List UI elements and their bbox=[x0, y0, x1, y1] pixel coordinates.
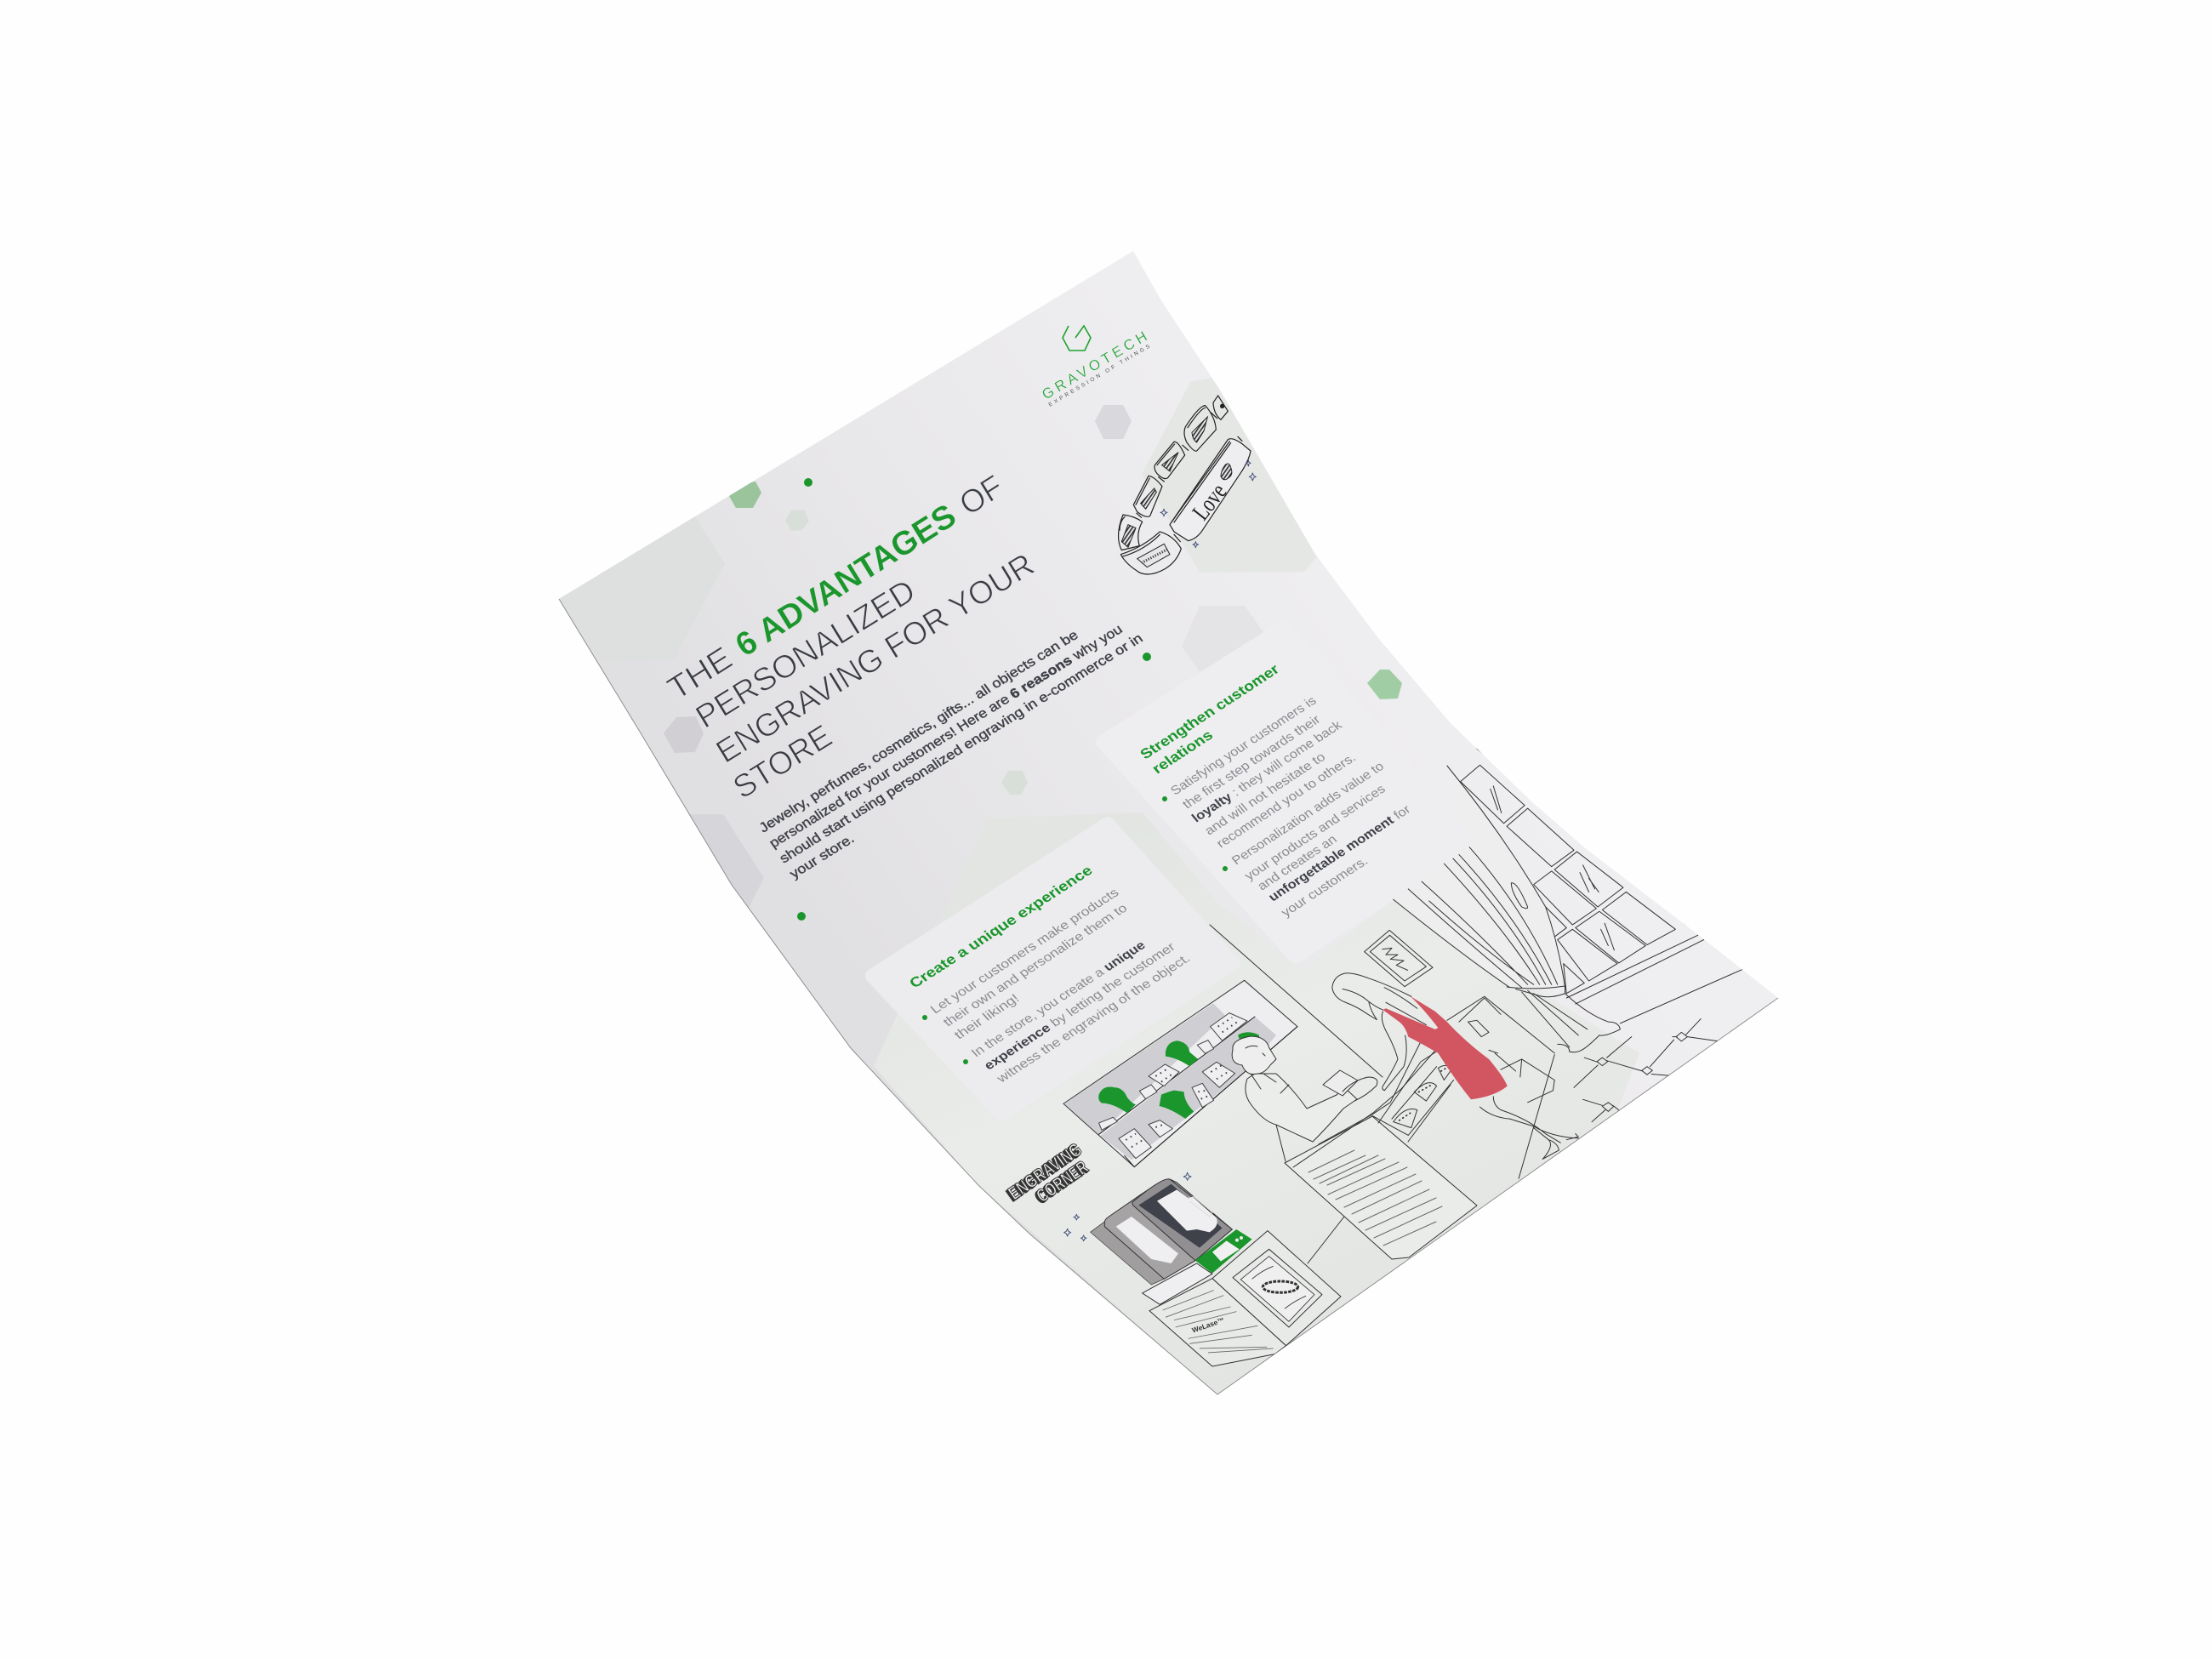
page edge shading bbox=[559, 599, 1778, 1394]
jewelry shelf bbox=[1063, 980, 1297, 1167]
curtain bbox=[1394, 766, 1620, 1052]
framed bracelet panel bbox=[1212, 1231, 1341, 1346]
logo hexagon icon bbox=[1063, 326, 1091, 351]
woman customer and window scene bbox=[1319, 749, 1742, 1178]
back display and floor tiles bbox=[1447, 996, 1719, 1178]
illustration: store interior bbox=[1004, 749, 1742, 1366]
card body text: Satisfying your customers is bbox=[1168, 693, 1320, 798]
brochure panel bbox=[1149, 1279, 1286, 1366]
engraved word Love: Love bbox=[1187, 478, 1232, 526]
card body text: recommend you to others. bbox=[1214, 750, 1359, 851]
card body text: Personalization adds value to bbox=[1229, 759, 1387, 868]
card body text: loyalty : they will come back bbox=[1189, 718, 1345, 825]
intro paragraph: should start using personalized engraving in e-commerce or in bbox=[777, 631, 1146, 866]
card body text: and will not hesitate to bbox=[1202, 750, 1328, 838]
machine body bbox=[1091, 1179, 1252, 1285]
intro paragraph: your store. bbox=[787, 832, 858, 881]
intro paragraph: personalized for your customers! Here are 6 reasons why you bbox=[767, 622, 1126, 851]
title bbox=[662, 469, 1040, 807]
card background bbox=[1103, 628, 1472, 957]
heading: engraving corner bbox=[1006, 1143, 1091, 1203]
tablet bbox=[1323, 1070, 1358, 1096]
jewelry display cards bbox=[1099, 1013, 1247, 1159]
card body text: the first step towards their bbox=[1180, 712, 1324, 812]
logo tagline: EXPRESSION OF THINGS bbox=[1047, 343, 1151, 408]
panel: create a unique experience bbox=[872, 824, 1234, 1115]
card heading: Strengthen customer bbox=[1137, 661, 1283, 762]
panel: strengthen customer relations bbox=[1103, 628, 1472, 957]
title: PERSONALIZED bbox=[690, 573, 921, 736]
back wall line bbox=[1210, 925, 1382, 1077]
logo bbox=[1039, 326, 1151, 408]
intro paragraph: Jewelry, perfumes, cosmetics, gifts... all objects can be bbox=[756, 628, 1081, 835]
title: STORE bbox=[727, 718, 838, 807]
icon: bracelet bbox=[1119, 396, 1256, 574]
WeLase label: WeLase™ bbox=[1191, 1315, 1225, 1335]
card background bbox=[872, 824, 1234, 1115]
card body text: In the store, you create a unique bbox=[968, 938, 1149, 1060]
card body text: and creates an bbox=[1255, 832, 1340, 893]
card body text: their own and personalize them to bbox=[940, 901, 1131, 1029]
picture frame bbox=[1365, 930, 1433, 987]
card body text: your products and services bbox=[1242, 782, 1388, 883]
paper bbox=[559, 251, 1778, 1394]
woman outline bbox=[1332, 973, 1578, 1159]
card heading: relations bbox=[1149, 727, 1216, 777]
window panes bbox=[1461, 749, 1742, 1023]
dress bbox=[1382, 996, 1508, 1099]
table top bbox=[1143, 1263, 1212, 1304]
title: ENGRAVING FOR YOUR bbox=[710, 547, 1040, 771]
card body text: your customers. bbox=[1279, 854, 1371, 920]
green necklace busts bbox=[1098, 1032, 1259, 1119]
card body text bbox=[1162, 693, 1414, 920]
title: THE bbox=[662, 640, 738, 708]
card body text: experience by letting the customer bbox=[981, 940, 1178, 1073]
salesman figure bbox=[1232, 1036, 1377, 1161]
card body text: unforgettable moment for bbox=[1266, 802, 1414, 904]
title: OF bbox=[954, 469, 1010, 523]
sparkles bbox=[1064, 1172, 1191, 1241]
background hexagons bbox=[560, 378, 1639, 1293]
green dots bbox=[797, 478, 1151, 921]
page sheet bbox=[544, 251, 1778, 1394]
showcase on counter bbox=[1319, 1043, 1454, 1144]
card body text: their liking! bbox=[951, 991, 1023, 1042]
card body text bbox=[922, 886, 1194, 1086]
counter and front panel bbox=[1285, 1038, 1477, 1263]
logo wordmark: GRAVOTECH bbox=[1039, 328, 1149, 402]
card heading: Create a unique experience bbox=[906, 863, 1096, 991]
card body text: witness the engraving of the object. bbox=[993, 951, 1194, 1086]
engraving machine and brochure stand bbox=[1064, 1172, 1341, 1366]
card body text: Let your customers make products bbox=[927, 886, 1122, 1017]
mockup scene bbox=[558, 251, 1778, 1395]
heading: engraving corner: ENGRAVING bbox=[1004, 1138, 1086, 1204]
title: 6 ADVANTAGES bbox=[729, 497, 962, 664]
heading: engraving corner: CORNER bbox=[1032, 1156, 1092, 1206]
